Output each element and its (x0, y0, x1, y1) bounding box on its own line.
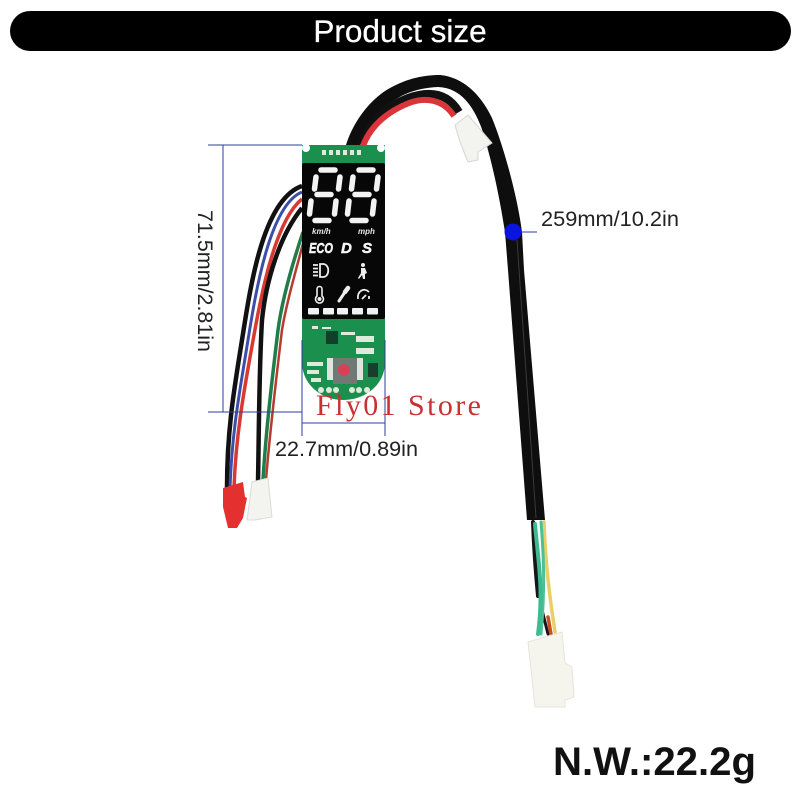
white left connector (247, 478, 272, 520)
mode labels (309, 240, 372, 257)
icon: wrench (339, 288, 348, 301)
inner red and black wires with small connector (362, 94, 492, 162)
store watermark: Fly01 Store (316, 389, 481, 422)
thick sheath cable (346, 75, 545, 520)
net weight: N.W.:22.2g (553, 740, 756, 784)
cable length marker (504, 224, 537, 240)
board components (307, 150, 374, 393)
green circuit board (302, 144, 385, 400)
battery bar segments (308, 308, 378, 314)
cable length label: 259mm/10.2in (541, 207, 679, 231)
unit labels: mph (358, 227, 375, 236)
red connector (223, 482, 247, 528)
icon: walking person (358, 263, 367, 279)
LCD display (302, 163, 385, 319)
white end connector (528, 632, 574, 707)
height dimension label: 71.5mm/2.81in (193, 210, 217, 352)
mode labels: ECO (309, 240, 333, 257)
mode labels: D (341, 240, 352, 257)
red push button (327, 358, 363, 384)
left side wires and connectors (223, 186, 304, 528)
width dimension label: 22.7mm/0.89in (275, 437, 418, 461)
width dimension lines (302, 340, 385, 436)
small white connector (455, 115, 492, 162)
unit labels (312, 227, 375, 236)
mode labels: S (362, 240, 372, 257)
icon: headlight (313, 264, 328, 277)
title bar: Product size (313, 13, 487, 49)
unit labels: km/h (312, 227, 331, 236)
icon: speedometer warning (358, 290, 369, 299)
bottom coloured wires (533, 522, 555, 634)
icon: thermometer (316, 286, 324, 303)
title bar (10, 11, 791, 51)
speed digits (310, 170, 378, 220)
height dimension lines (208, 145, 302, 412)
main black cable with end wires and connector (346, 75, 574, 707)
